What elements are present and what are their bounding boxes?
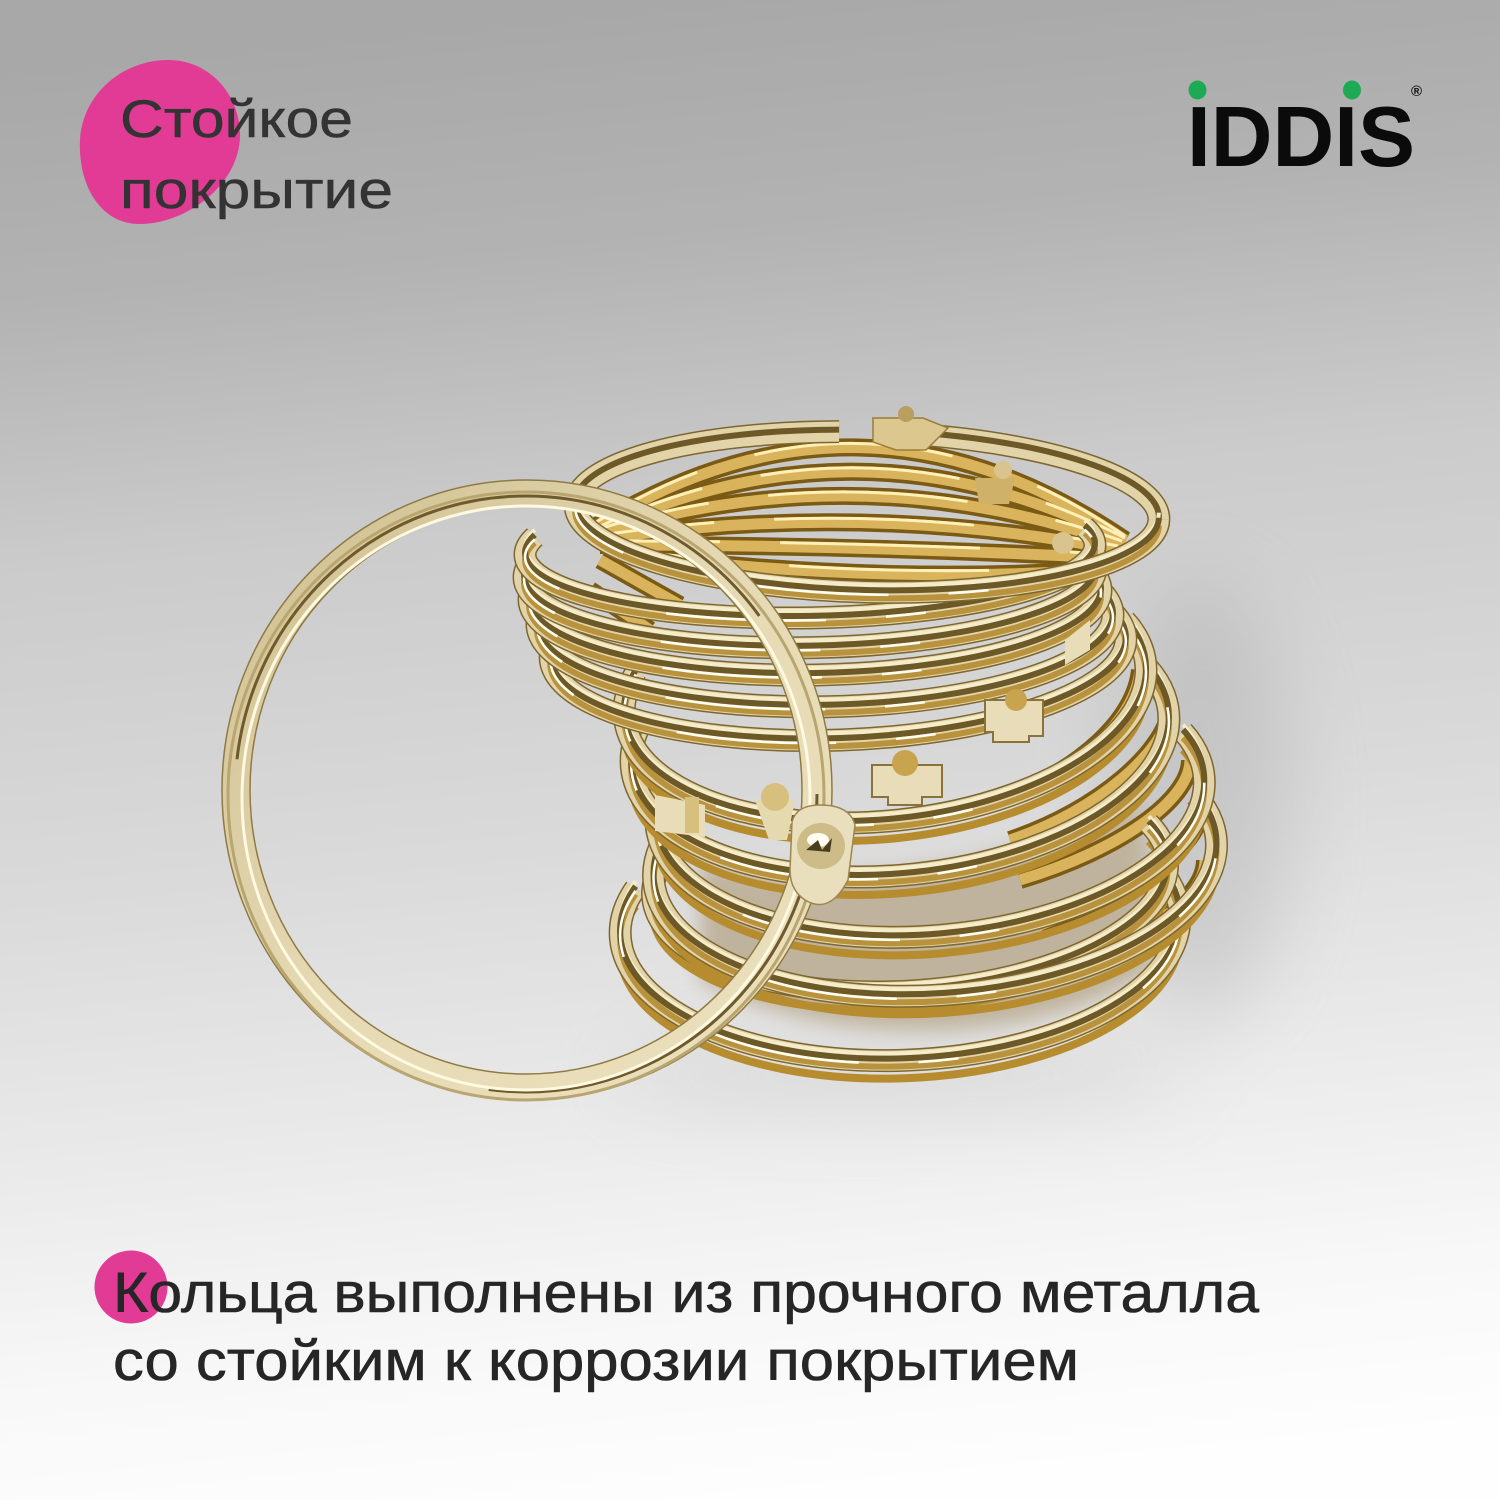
lower right back stripes (590, 560, 1205, 965)
logo: ® (1411, 83, 1422, 100)
caption (113, 1261, 1259, 1393)
pink blob: caption (94, 1250, 168, 1324)
ring stack: lower rings (619, 612, 1226, 1088)
heading: Стойкое (120, 90, 353, 149)
caption: Кольца выполнены из прочного металла (113, 1261, 1259, 1325)
logo: IDDIS (1187, 90, 1415, 185)
large front ring (222, 480, 855, 1100)
heading (120, 90, 393, 220)
top ring (573, 423, 1161, 606)
clasps on rings (655, 620, 1090, 840)
ring shadow (610, 580, 1290, 1105)
heading: покрытие (120, 161, 393, 220)
top clasps (873, 406, 1074, 554)
inner beige reflection (700, 800, 1160, 1031)
ring stack: back arcs (590, 443, 1205, 1031)
ring stack: middle rings (524, 520, 1129, 756)
caption: со стойким к коррозии покрытием (113, 1329, 1079, 1393)
clasp (790, 805, 855, 904)
pink blob: heading (80, 60, 240, 224)
upper back rings (590, 443, 1125, 575)
